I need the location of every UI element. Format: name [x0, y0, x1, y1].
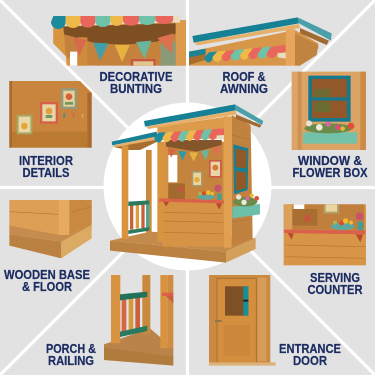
photo: bunting [51, 16, 186, 66]
label [292, 154, 368, 180]
label: SERVING [310, 271, 360, 285]
label: INTERIOR [19, 154, 73, 168]
photo: counter [284, 204, 366, 265]
central circle with playhouse [104, 102, 272, 270]
label: ENTRANCE [279, 342, 341, 356]
panel: interior details [9, 81, 92, 180]
label: PORCH & [46, 342, 96, 356]
panel: entrance door [209, 275, 341, 368]
photo: window [292, 72, 366, 150]
panel: porch and railing [46, 275, 173, 368]
label [4, 268, 90, 294]
panel: decorative bunting [51, 16, 186, 96]
photo: roof [189, 17, 332, 66]
label: DOOR [293, 354, 327, 368]
photo: door [209, 275, 276, 366]
label: RAILING [48, 354, 94, 368]
panel: wooden base and floor [4, 200, 92, 294]
label: COUNTER [308, 283, 362, 297]
label [220, 70, 268, 96]
label: AWNING [220, 82, 268, 96]
label [308, 271, 362, 297]
panel: window and flower box [292, 72, 368, 180]
label: DECORATIVE [100, 70, 172, 84]
label: & FLOOR [22, 280, 72, 294]
photo: porch [104, 275, 173, 366]
playhouse [110, 104, 263, 263]
photo: interior [9, 81, 92, 148]
label: WINDOW & [298, 154, 362, 168]
label [19, 154, 73, 180]
label [279, 342, 341, 368]
label: DETAILS [22, 166, 70, 180]
label [100, 70, 172, 96]
panel: roof and awning [189, 17, 332, 96]
white circle [104, 102, 272, 270]
panel: serving counter [284, 204, 366, 297]
label: FLOWER BOX [292, 166, 368, 180]
label: WOODEN BASE [4, 268, 90, 282]
photo: base [9, 200, 92, 258]
label [46, 342, 96, 368]
label: ROOF & [222, 70, 266, 84]
label: BUNTING [110, 82, 162, 96]
